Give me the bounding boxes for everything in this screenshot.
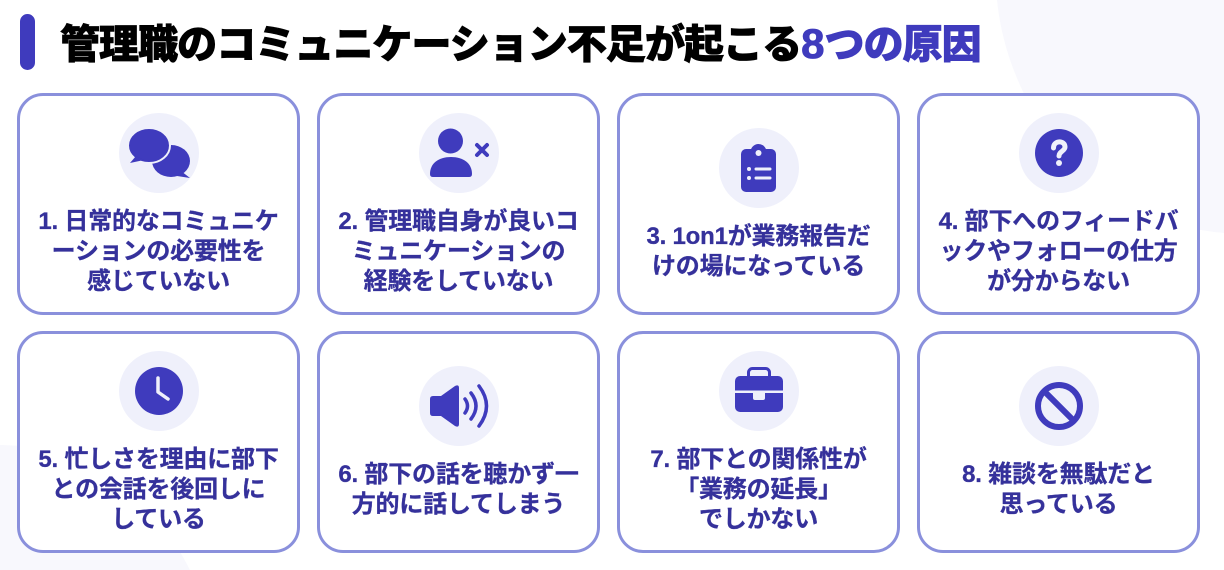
text: cause 7: でしかない (699, 506, 818, 533)
text: cause 5: している (111, 506, 206, 533)
text: cause 2 (338, 208, 579, 295)
text: cause 5: 5. 忙しさを理由に部下 (38, 446, 279, 473)
text: cause 3 (646, 222, 871, 280)
panel: cause 8 (917, 331, 1200, 553)
icon: clipboard list (719, 128, 799, 208)
panel: cause 1 (17, 93, 300, 315)
text: cause 5: との会話を後回しに (52, 476, 265, 503)
text: cause 7 (650, 446, 867, 533)
text: cause 4: ックやフォローの仕方 (940, 238, 1178, 265)
text: cause 8: 思っている (1000, 491, 1117, 518)
text: cause 4 (938, 208, 1178, 295)
icon: speech bubbles (119, 113, 199, 193)
panel: cause 7 (617, 331, 900, 553)
icon: speaker (419, 366, 499, 446)
text: cause 8: 8. 雑談を無駄だと (962, 461, 1155, 488)
text: cause 2: 経験をしていない (364, 268, 553, 295)
panel: cause 4 (917, 93, 1200, 315)
icon: briefcase (719, 351, 799, 431)
text: cause 7: 7. 部下との関係性が (650, 446, 867, 473)
text: cause 4: が分からない (987, 268, 1130, 295)
text: cause 7: 「業務の延長」 (675, 476, 842, 503)
text: cause 1: ーションの必要性を (52, 238, 265, 265)
text: cause 1 (38, 208, 279, 295)
text: cause 4: 4. 部下へのフィードバ (939, 208, 1178, 235)
text: cause 1: 1. 日常的なコミュニケ (38, 208, 279, 235)
text: cause 5 (38, 446, 279, 533)
icon: question mark (1019, 113, 1099, 193)
text: cause 1: 感じていない (87, 268, 230, 295)
text: cause 2: ミュニケーションの (352, 238, 565, 265)
text: cause 6 (338, 461, 579, 518)
title accent bar (20, 14, 35, 70)
icon: person with cross (419, 113, 499, 193)
panel: cause 5 (17, 331, 300, 553)
text: cause 3: けの場になっている (652, 253, 865, 280)
text: cause 2: 2. 管理職自身が良いコ (338, 208, 579, 235)
text: cause 6: 6. 部下の話を聴かず一 (338, 461, 579, 488)
panel: cause 2 (317, 93, 600, 315)
panel: cause 6 (317, 331, 600, 553)
text: cause 3: 3. 1on1が業務報告だ (646, 223, 871, 250)
icon: clock (119, 351, 199, 431)
icon: prohibited sign (1019, 366, 1099, 446)
title: 管理職のコミュニケーション不足が起こる8つの原因 (60, 20, 981, 67)
text: cause 8 (962, 461, 1155, 518)
panel: cause 3 (617, 93, 900, 315)
text: cause 6: 方的に話してしまう (352, 491, 565, 518)
